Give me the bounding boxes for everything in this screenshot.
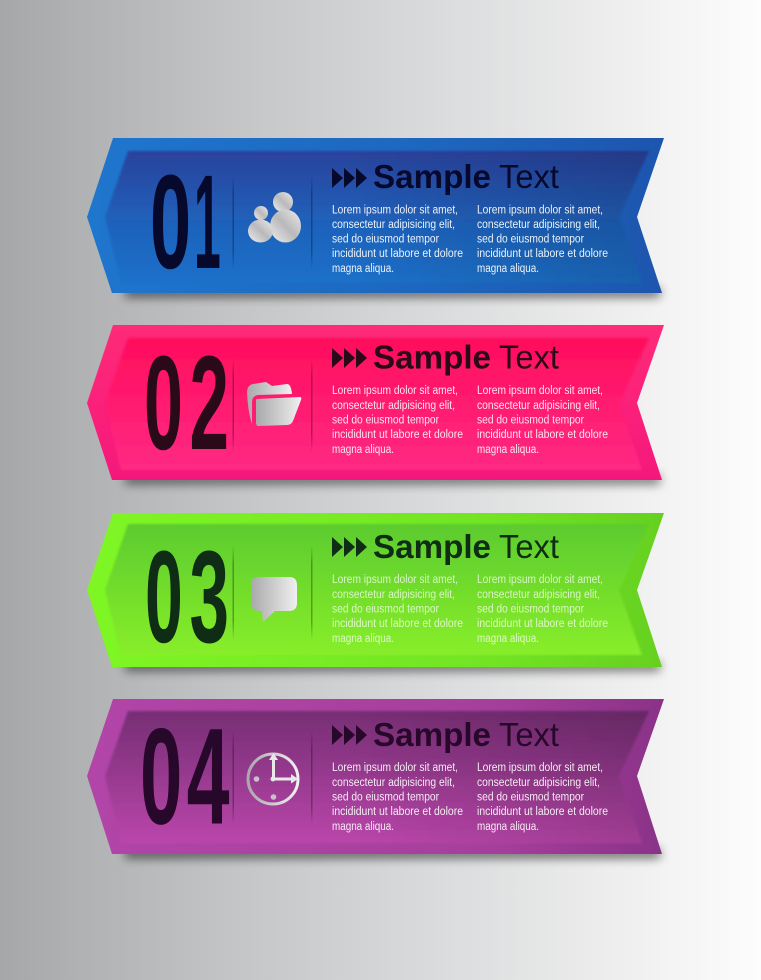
divider left <box>232 545 234 640</box>
text column 2: Lorem ipsum dolor sit amet, <box>477 574 603 586</box>
text column 1: magna aliqua. <box>332 444 394 456</box>
divider left <box>232 358 234 453</box>
text column 2: magna aliqua. <box>477 633 539 645</box>
text column 1: sed do eiusmod tempor <box>332 604 439 616</box>
text column 1: Lorem ipsum dolor sit amet, <box>332 574 458 586</box>
text column 2: magna aliqua. <box>477 821 539 833</box>
divider left <box>232 175 234 270</box>
banner 02 inner shape <box>105 338 649 470</box>
banner 04 inner shading <box>105 711 649 843</box>
arrows <box>332 168 367 188</box>
banner 01 shadow <box>125 288 660 297</box>
icon: folder <box>247 382 301 426</box>
divider right <box>311 545 312 640</box>
text column 1: sed do eiusmod tempor <box>332 792 439 804</box>
divider right <box>311 175 312 270</box>
panel: banner 01 blue: 1 <box>194 148 221 297</box>
text column 2: sed do eiusmod tempor <box>477 234 584 246</box>
text column 1 <box>332 762 463 833</box>
text column 1: consectetur adipisicing elit, <box>332 400 455 412</box>
banner 04 inner shape <box>105 711 649 843</box>
heading: Text <box>499 158 559 195</box>
number 04: 4 <box>187 700 230 853</box>
text column 2: Lorem ipsum dolor sit amet, <box>477 762 603 774</box>
text column 1: incididunt ut labore et dolore <box>332 429 463 441</box>
text column 1: incididunt ut labore et dolore <box>332 618 463 630</box>
text column 1: magna aliqua. <box>332 633 394 645</box>
arrows <box>332 348 367 368</box>
heading: Text <box>499 338 559 376</box>
banner 03 outer shape <box>87 513 664 667</box>
text column 1: Lorem ipsum dolor sit amet, <box>332 385 458 397</box>
banner 01 outer shape <box>87 138 664 293</box>
text column 2: incididunt ut labore et dolore <box>477 248 608 260</box>
banner 02 shadow <box>125 475 660 484</box>
text column 2: sed do eiusmod tempor <box>477 604 584 616</box>
text column 2: magna aliqua. <box>477 263 539 275</box>
text column 1 <box>332 385 463 456</box>
text column 2: consectetur adipisicing elit, <box>477 219 600 231</box>
text column 2: Lorem ipsum dolor sit amet, <box>477 204 603 216</box>
text column 2 <box>477 762 608 833</box>
text column 1: sed do eiusmod tempor <box>332 234 439 246</box>
panel: banner 01 blue <box>87 138 664 297</box>
text column 2: Lorem ipsum dolor sit amet, <box>477 385 603 397</box>
text column 2: sed do eiusmod tempor <box>477 414 584 426</box>
banner 01 inner shading <box>105 151 649 283</box>
arrows <box>332 537 367 557</box>
divider right <box>311 730 312 825</box>
panel: banner 02 pink <box>87 325 664 484</box>
text column 1: sed do eiusmod tempor <box>332 414 439 426</box>
number 03: 3 <box>190 524 229 670</box>
banner 02 outer shape <box>87 325 664 480</box>
number 04: 0 <box>140 700 182 853</box>
text column 2 <box>477 385 608 456</box>
text column 2: incididunt ut labore et dolore <box>477 429 608 441</box>
banner 01 inner shape <box>105 151 649 283</box>
text column 1: consectetur adipisicing elit, <box>332 219 455 231</box>
heading: Text <box>499 716 559 753</box>
panel: banner 03 green <box>87 513 664 671</box>
text column 2 <box>477 574 608 645</box>
text column 2: sed do eiusmod tempor <box>477 792 584 804</box>
banner 03 shadow <box>125 662 660 671</box>
text column 2: consectetur adipisicing elit, <box>477 400 600 412</box>
text column 2: consectetur adipisicing elit, <box>477 777 600 789</box>
text column 1: incididunt ut labore et dolore <box>332 248 463 260</box>
icon: clock <box>248 753 298 804</box>
text column 2: incididunt ut labore et dolore <box>477 806 608 818</box>
banner 04 outer shape <box>87 699 664 854</box>
text column 2 <box>477 204 608 275</box>
number 03: 0 <box>145 524 183 670</box>
text column 1: magna aliqua. <box>332 263 394 275</box>
icon: people <box>248 192 301 242</box>
arrows <box>332 725 367 745</box>
text column 1: consectetur adipisicing elit, <box>332 589 455 601</box>
text column 1: Lorem ipsum dolor sit amet, <box>332 204 458 216</box>
text column 1 <box>332 574 463 645</box>
divider left <box>232 730 234 825</box>
panel: banner 04 purple <box>87 699 664 858</box>
divider right <box>311 358 312 453</box>
number 02: 0 <box>144 329 183 478</box>
banner 03 inner shape <box>105 524 649 655</box>
text column 2: consectetur adipisicing elit, <box>477 589 600 601</box>
text column 2: magna aliqua. <box>477 444 539 456</box>
heading: Sample <box>373 338 491 376</box>
heading: Text <box>499 528 559 565</box>
number 01: 0 <box>150 148 191 297</box>
text column 1 <box>332 204 463 275</box>
icon: speech bubble <box>251 577 297 622</box>
text column 1: consectetur adipisicing elit, <box>332 777 455 789</box>
heading: Sample <box>373 716 491 753</box>
number 02: 2 <box>190 329 229 478</box>
heading: Sample <box>373 528 491 565</box>
text column 2: incididunt ut labore et dolore <box>477 618 608 630</box>
text column 1: incididunt ut labore et dolore <box>332 806 463 818</box>
text column 1: magna aliqua. <box>332 821 394 833</box>
text column 1: Lorem ipsum dolor sit amet, <box>332 762 458 774</box>
heading: Sample <box>373 158 491 195</box>
banner 04 shadow <box>125 849 660 858</box>
